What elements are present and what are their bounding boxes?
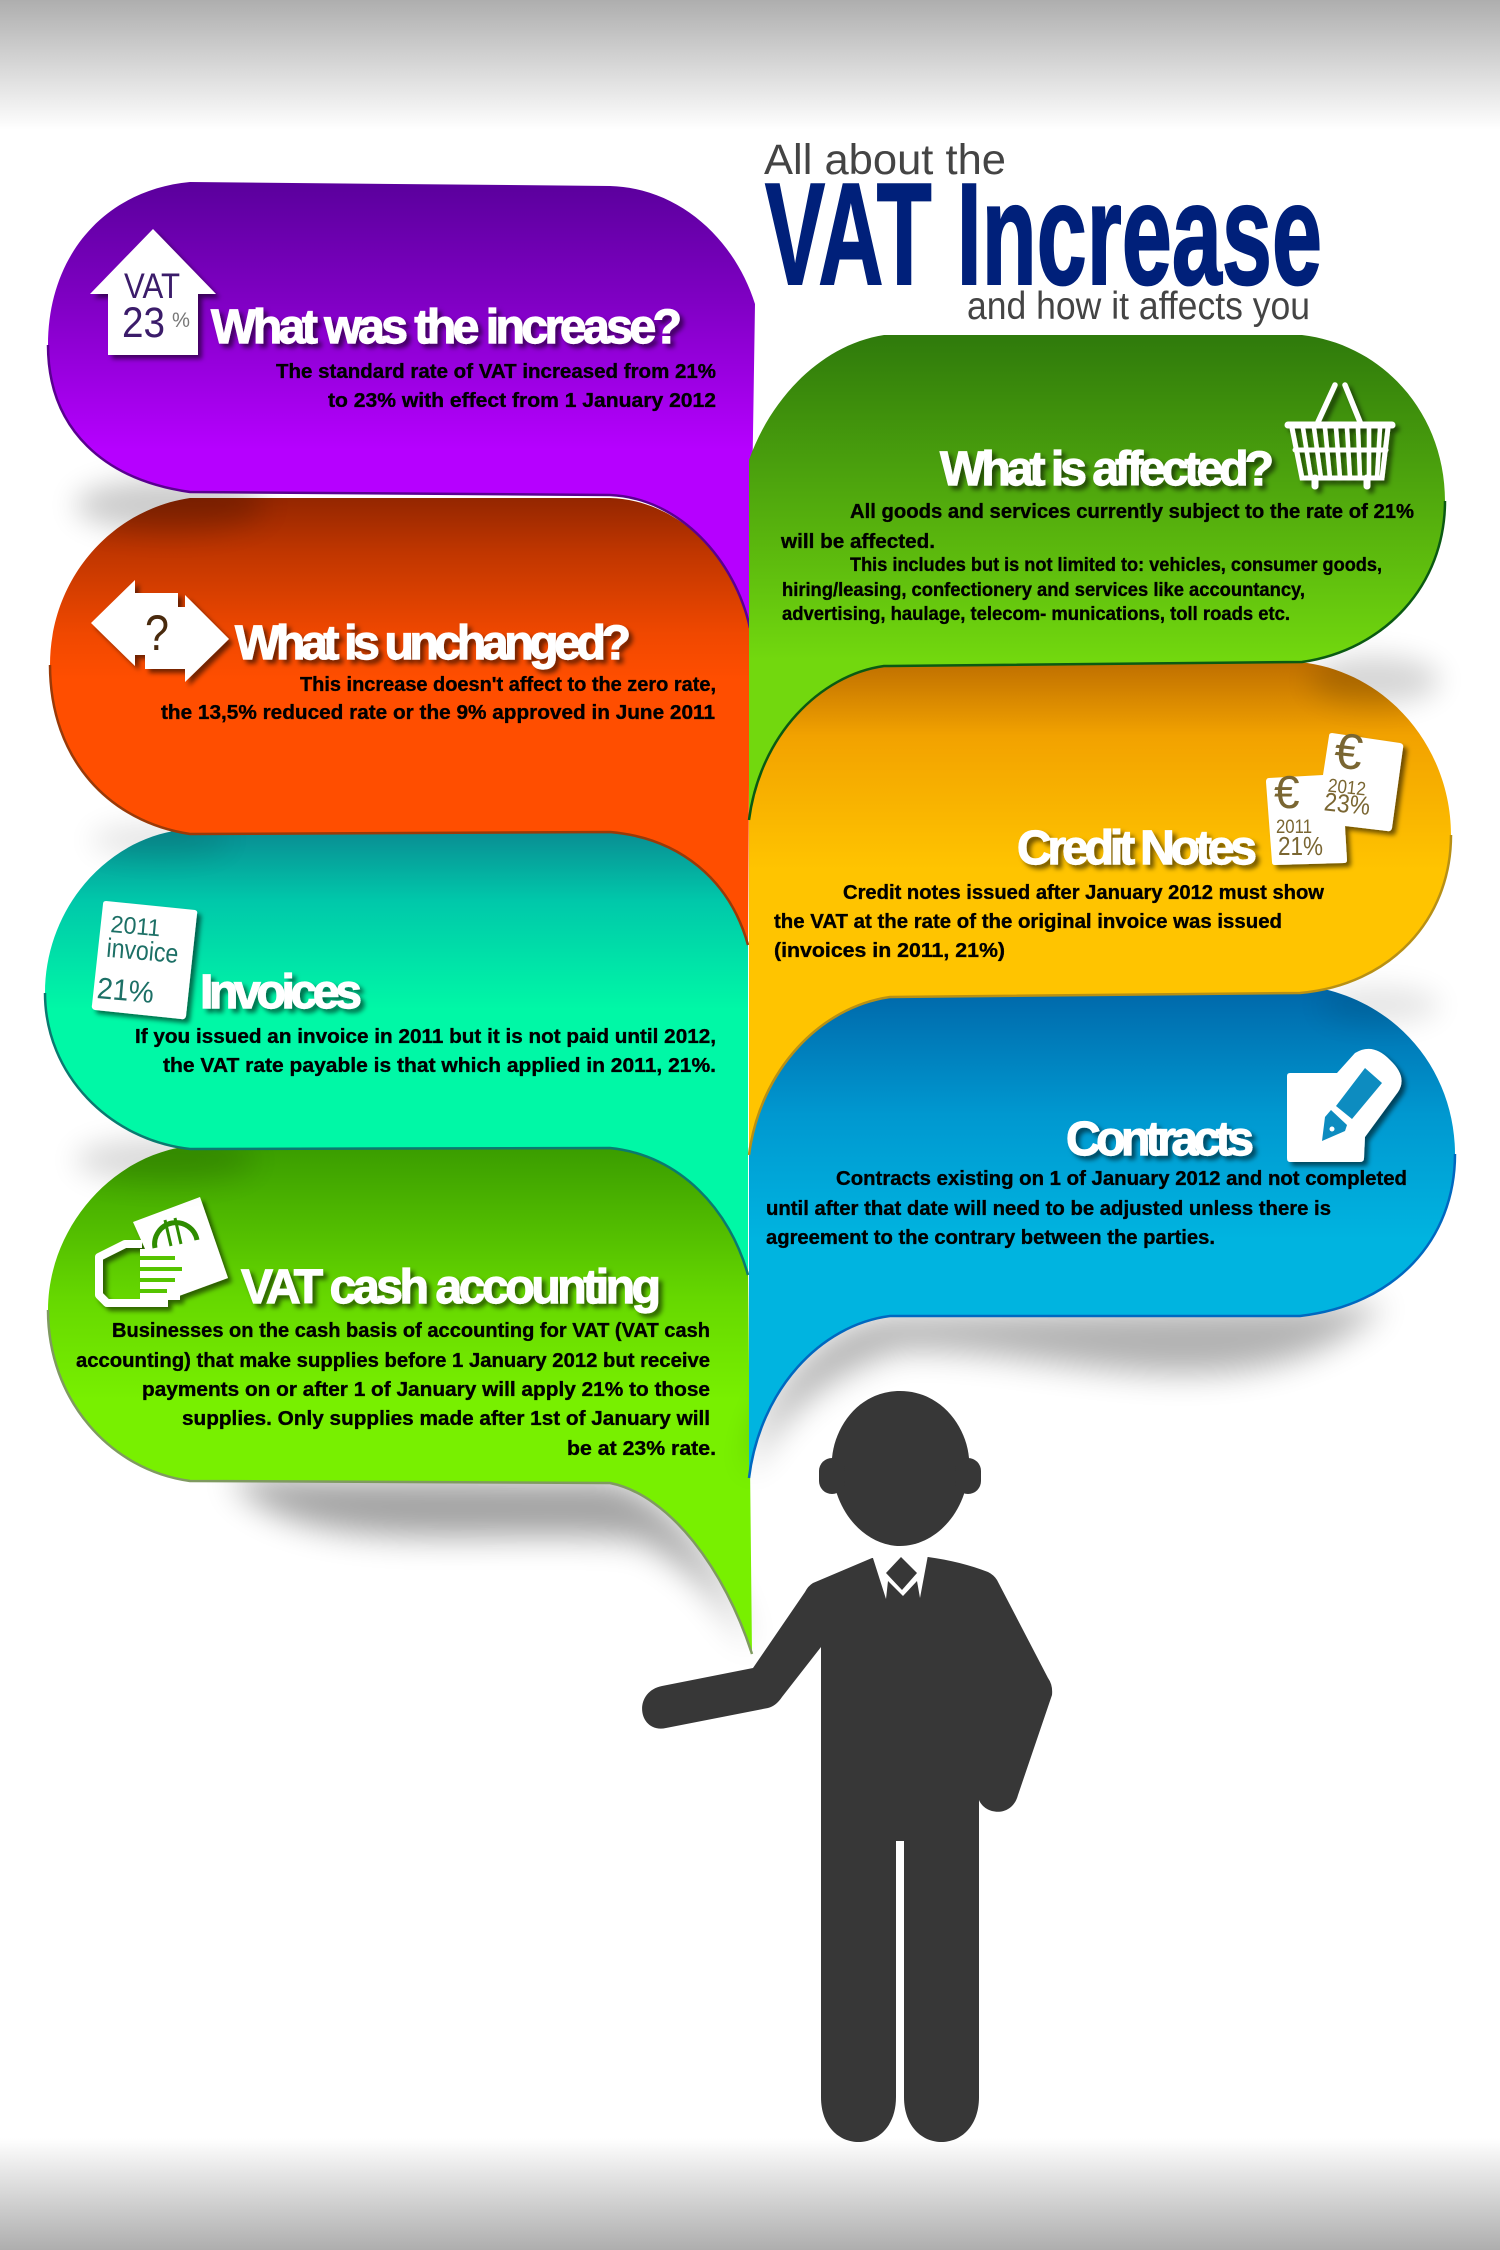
- body text: All goods and services currently subject to the rate of 21%: [850, 501, 1414, 523]
- body text: [766, 1168, 1407, 1249]
- speech bubble: [749, 335, 1445, 820]
- heading: What is unchanged?: [235, 617, 631, 670]
- body text: [780, 501, 1414, 625]
- body text: the VAT at the rate of the original invoice was issued: [774, 911, 1282, 933]
- icon: two credit note cards: 23%: [1323, 786, 1372, 821]
- body text: to 23% with effect from 1 January 2012: [328, 390, 716, 412]
- speech bubble: [48, 1146, 752, 1654]
- body text: Businesses on the cash basis of accounting for VAT (VAT cash: [112, 1320, 710, 1342]
- body text: Contracts existing on 1 of January 2012 and not completed: [836, 1168, 1407, 1190]
- icon: pen on paper: [1287, 1049, 1402, 1162]
- icon: up arrow house VAT 23%: 23: [122, 299, 165, 347]
- body text: accounting) that make supplies before 1 January 2012 but receive: [76, 1350, 710, 1372]
- heading: VAT cash accounting: [241, 1261, 661, 1314]
- bubble edge: [48, 345, 750, 628]
- panel: contracts: [749, 985, 1455, 1478]
- body text: This includes but is not limited to: vehicles, consumer goods,: [850, 555, 1382, 576]
- heading: Contracts: [1066, 1113, 1254, 1166]
- body text: (invoices in 2011, 21%): [774, 940, 1005, 962]
- icon: up arrow house VAT 23%: [90, 229, 216, 355]
- heading: What was the increase?: [211, 301, 682, 354]
- speech bubble: [48, 182, 755, 628]
- bubble edge: [50, 665, 748, 945]
- icon: up arrow house VAT 23%: VAT: [124, 267, 180, 306]
- bubble edge: [749, 1154, 1455, 1478]
- panel: credit notes: [749, 662, 1451, 1155]
- bubble edge: [48, 1310, 752, 1654]
- body text: supplies. Only supplies made after 1st of January will: [182, 1408, 710, 1430]
- icon: invoice card: 2011: [109, 911, 162, 942]
- icon: shopping basket: [1288, 385, 1392, 486]
- panel: what is affected: [749, 335, 1445, 820]
- body text: will be affected.: [780, 531, 935, 553]
- icon: two credit note cards: 21%: [1278, 831, 1323, 861]
- body text: [76, 1320, 716, 1460]
- body text: [774, 882, 1324, 962]
- body text: agreement to the contrary between the parties.: [766, 1227, 1215, 1249]
- person silhouette: [642, 1391, 1052, 2142]
- icon: invoice card: invoice: [105, 933, 180, 969]
- panel: VAT cash accounting: [48, 1146, 752, 1654]
- icon: two credit note cards: 2012: [1327, 776, 1367, 800]
- body text: [135, 1026, 716, 1077]
- body text: advertising, haulage, telecom- munications, toll roads etc.: [782, 604, 1290, 625]
- speech bubble: [45, 828, 748, 1275]
- icon: invoice card: 21%: [96, 972, 155, 1010]
- body text: the VAT rate payable is that which applied in 2011, 21%.: [163, 1055, 716, 1077]
- body text: hiring/leasing, confectionery and services like accountancy,: [782, 580, 1305, 601]
- icon: invoice card: [92, 901, 197, 1019]
- panel: what is unchanged: [50, 498, 750, 945]
- body text: The standard rate of VAT increased from 21%: [276, 361, 716, 383]
- icon: two credit note cards: €: [1274, 766, 1300, 818]
- icon: double arrow with question mark: ?: [145, 605, 169, 661]
- bubble edge: [749, 501, 1445, 820]
- heading: Credit Notes: [1017, 822, 1257, 875]
- icon: double arrow with question mark: [91, 580, 229, 682]
- speech bubble: [749, 985, 1455, 1478]
- panel: what was the increase: [48, 182, 755, 628]
- body text: be at 23% rate.: [567, 1438, 716, 1460]
- body text: If you issued an invoice in 2011 but it is not paid until 2012,: [135, 1026, 716, 1048]
- panel: invoices: [45, 828, 748, 1275]
- icon: hand holding banknote: [99, 1197, 228, 1303]
- icon: two credit note cards: [1266, 722, 1403, 865]
- body text: payments on or after 1 of January will apply 21% to those: [142, 1379, 710, 1401]
- body text: [276, 361, 716, 412]
- body text: the 13,5% reduced rate or the 9% approved in June 2011: [161, 702, 715, 724]
- body text: This increase doesn't affect to the zero rate,: [300, 674, 716, 696]
- body text: [161, 674, 716, 724]
- bubble edge: [749, 835, 1451, 1155]
- title: All about the: [764, 136, 1006, 184]
- icon: two credit note cards: 2011: [1276, 817, 1312, 838]
- title: and how it affects you: [967, 285, 1310, 328]
- icon: up arrow house VAT 23%: %: [172, 309, 190, 332]
- body text: until after that date will need to be adjusted unless there is: [766, 1198, 1331, 1220]
- body text: Credit notes issued after January 2012 must show: [843, 882, 1324, 904]
- title: [764, 136, 1322, 328]
- speech bubble: [50, 498, 750, 945]
- icon: two credit note cards: €: [1332, 722, 1366, 781]
- bubble edge: [45, 993, 748, 1275]
- heading: Invoices: [200, 966, 362, 1019]
- speech bubble: [749, 662, 1451, 1155]
- heading: What is affected?: [940, 443, 1274, 496]
